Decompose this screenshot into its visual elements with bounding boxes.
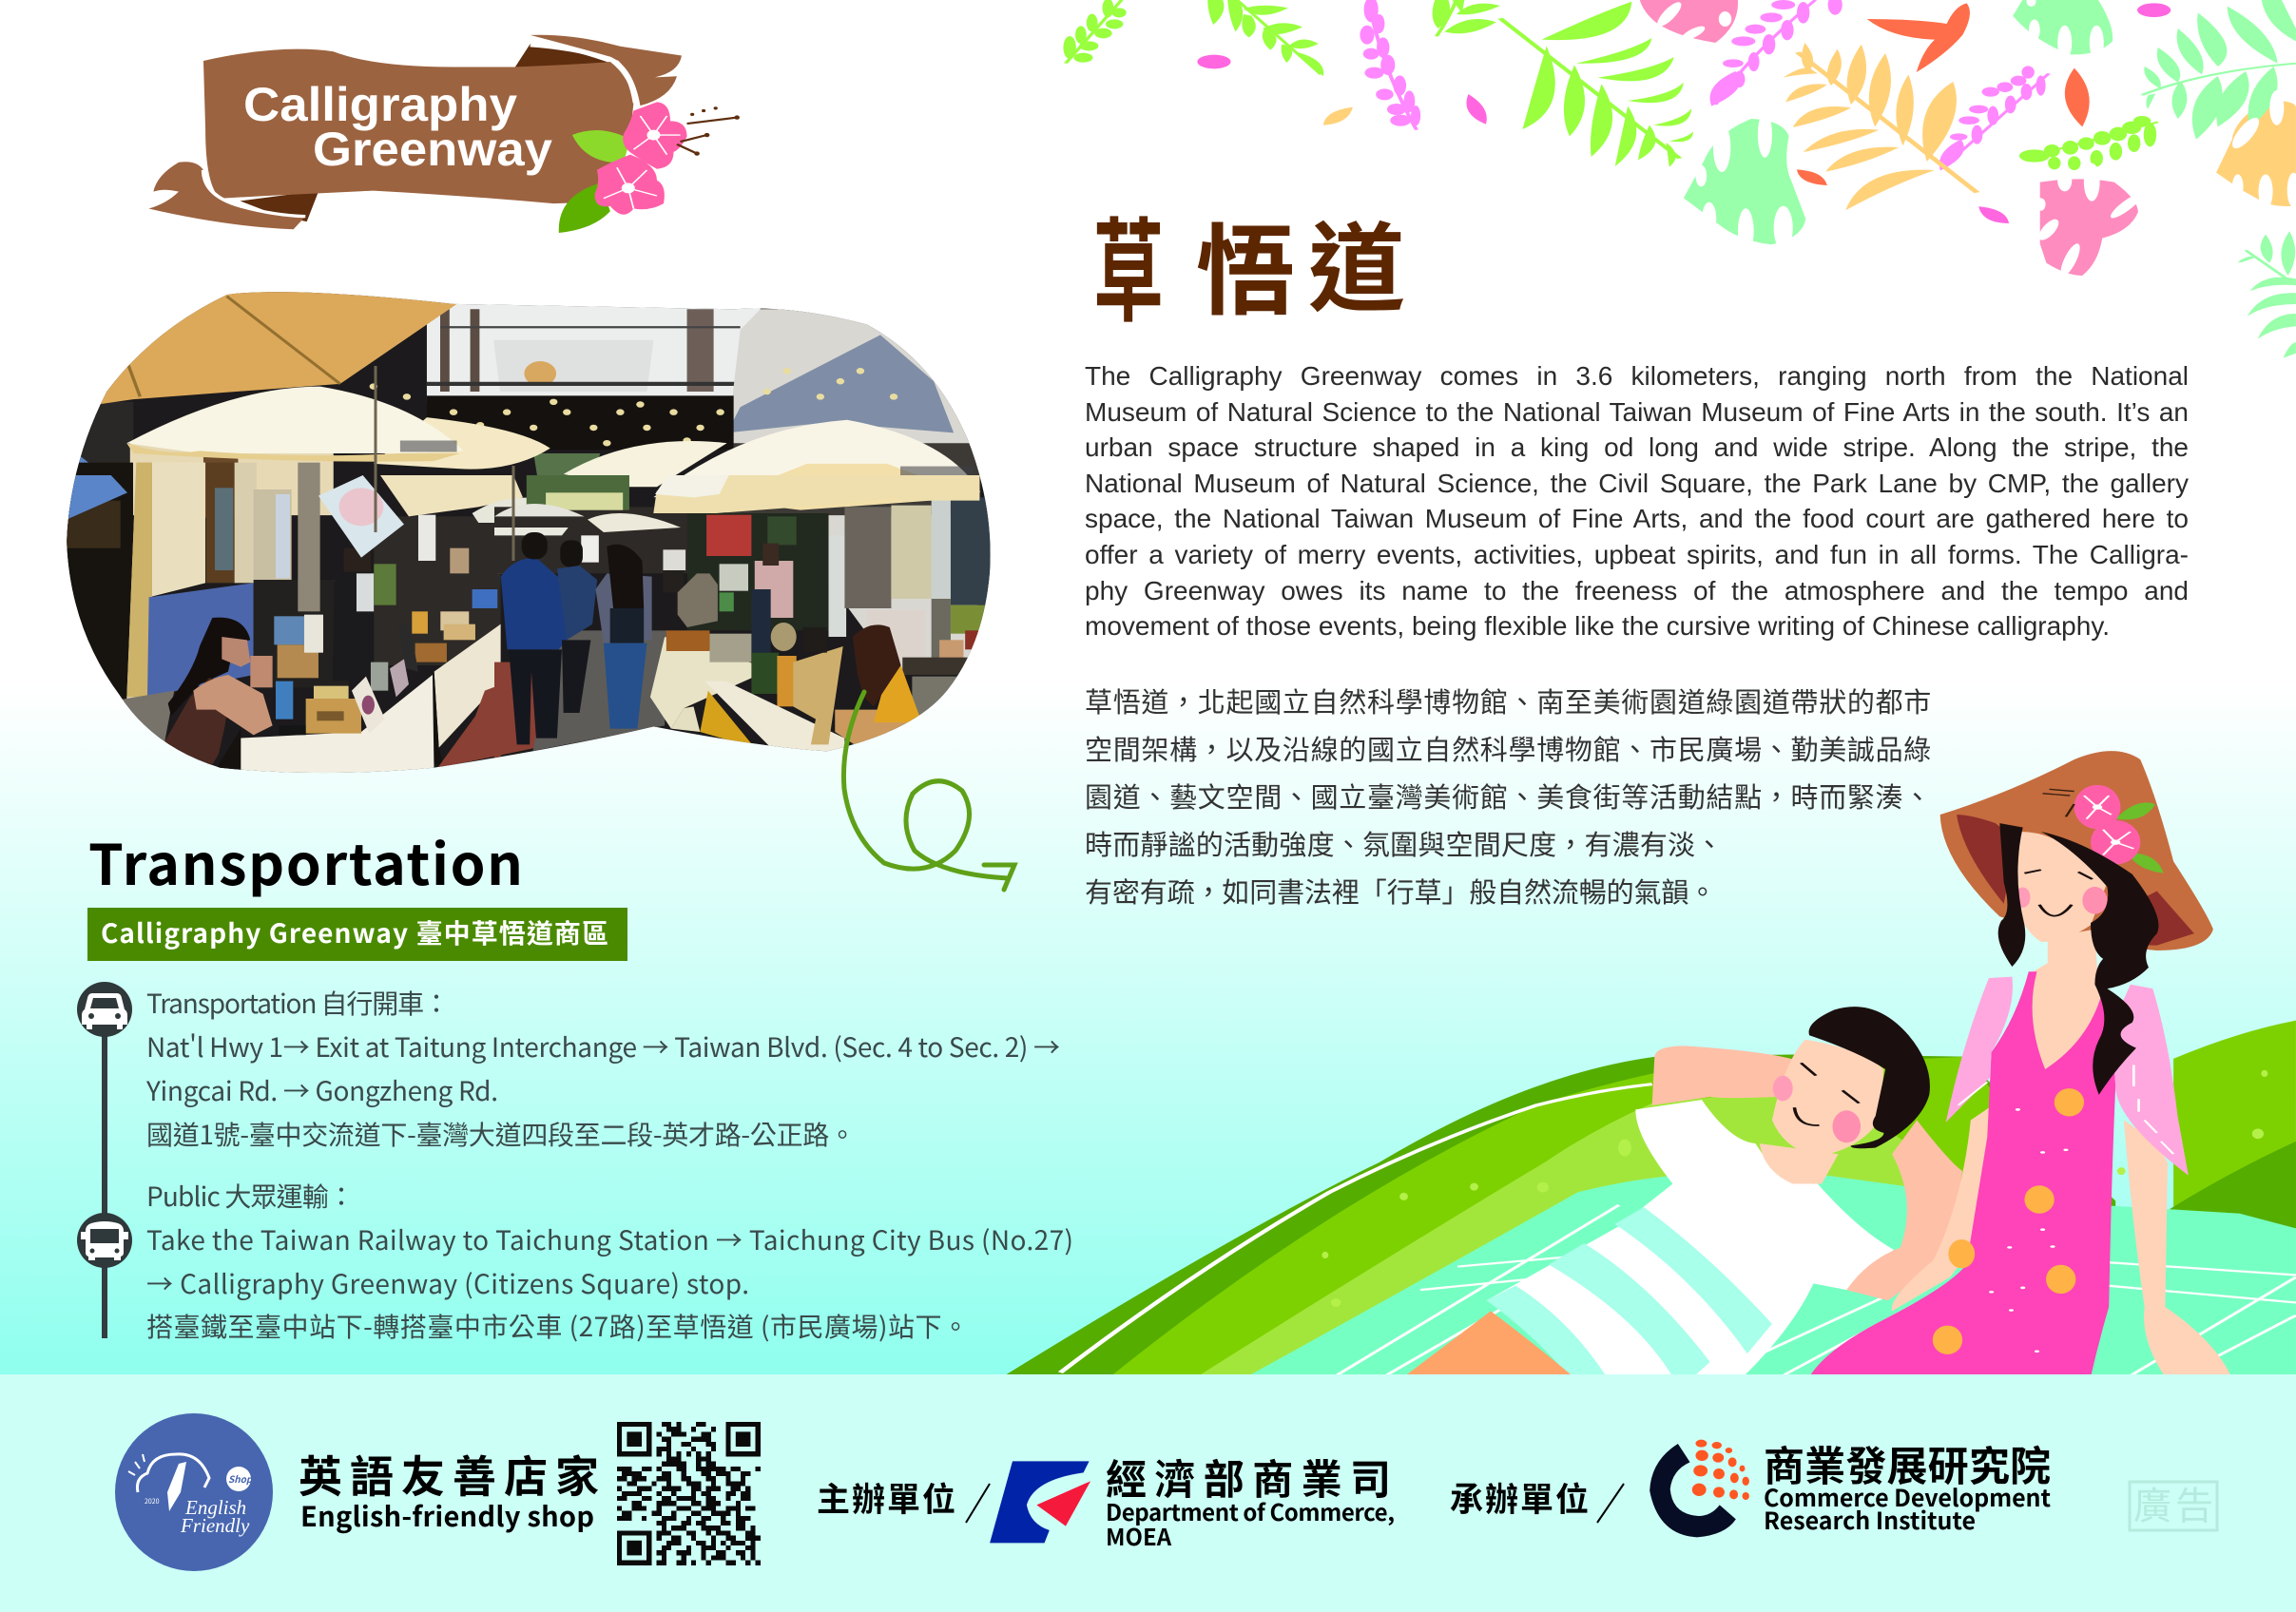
photo: central crowd and right stalls <box>494 475 993 760</box>
English paragraph: urban space structure shaped in a king od long and wide stripe. Along the stripe, the <box>1085 432 2189 462</box>
subheading bar: shop district <box>87 908 627 961</box>
English paragraph: Museum of Natural Science to the National Taiwan Museum of Fine Arts in the south. It’s an <box>1085 397 2189 427</box>
woman <box>1809 751 2231 1377</box>
route text: Public 大眾運輸： <box>146 1177 355 1215</box>
English-friendly shop label <box>299 1443 599 1535</box>
organizer name: CDRI: 商業發展研究院 <box>1764 1434 2051 1493</box>
organizer name: CDRI <box>1764 1434 2051 1537</box>
route text: Transportation 自行開車： <box>146 984 450 1022</box>
arrow: green swirl <box>843 692 1014 890</box>
icon: bus <box>77 1213 132 1268</box>
photo: green trees <box>534 453 601 475</box>
route timeline <box>77 982 1073 1345</box>
English paragraph: phy Greenway owes its name to the freeness of the atmosphere and the tempo and <box>1085 576 2189 605</box>
English paragraph: The Calligraphy Greenway comes in 3.6 kilometers, ranging north from the National <box>1085 361 2189 391</box>
QR code <box>617 1425 761 1563</box>
icon: car <box>77 982 132 1037</box>
logo: Department of Commerce <box>990 1461 1090 1543</box>
heading: 草悟道 <box>1093 182 1405 345</box>
ribbon shape <box>148 35 682 229</box>
photo: parasols <box>374 417 550 470</box>
English-friendly shop label: 英語友善店家 <box>299 1443 599 1506</box>
photo: lower street in page coordinates <box>48 366 993 777</box>
logo: English Friendly: 2020 <box>145 1497 160 1506</box>
English paragraph: National Museum of Natural Science, the Civil Square, the Park Lane by CMP, the gallery <box>1085 469 2189 498</box>
picnic blanket <box>1246 1176 2296 1377</box>
English paragraph: offer a variety of merry events, activities, upbeat spirits, and fun in all forms. The Calligra- <box>1085 540 2189 569</box>
man <box>1404 1007 1962 1377</box>
photo: parasol poles <box>376 366 513 561</box>
photo: string-light bridge <box>427 395 734 450</box>
subheading bar: shop district: Calligraphy Greenway 臺中草悟道商區 <box>101 913 608 951</box>
English paragraph: movement of those events, being flexible like the cursive writing of Chinese calligraphy. <box>1085 611 2110 641</box>
route text: Take the Taiwan Railway to Taichung Station → Taichung City Bus (No.27) <box>146 1220 1073 1258</box>
banner text: Calligraphy <box>243 78 517 131</box>
Chinese paragraph: 園道、藝文空間、國立臺灣美術館、美食街等活動結點，時而緊湊、 <box>1085 776 1932 816</box>
photo: left side stalls <box>48 463 551 777</box>
route text: 搭臺鐵至臺中站下-轉搭臺中市公車 (27路)至草悟道 (市民廣場)站下。 <box>146 1307 969 1345</box>
organizer name: MOEA: Department of Commerce, <box>1106 1494 1395 1527</box>
illustration: couple on a picnic hill <box>1002 751 2296 1377</box>
logo: English Friendly: Shop <box>228 1471 254 1486</box>
organizer label: 主辦單位 <box>817 1473 957 1522</box>
heading: Transportation: Transportation <box>88 820 523 901</box>
hills <box>1002 1021 2296 1377</box>
route text: 國道1號-臺中交流道下-臺灣大道四段至二段-英才路-公正路。 <box>146 1115 856 1153</box>
route text: Yingcai Rd. → Gongzheng Rd. <box>145 1071 498 1109</box>
organizer name: MOEA <box>1106 1448 1395 1552</box>
photo: sky and banner <box>427 304 761 402</box>
Chinese paragraph <box>1085 681 1932 911</box>
footer band <box>0 1374 2296 1612</box>
photo: upper left wall <box>67 402 133 515</box>
heading: 草悟道: 草 <box>1093 182 1164 345</box>
braid <box>2041 832 2158 1095</box>
Chinese paragraph: 時而靜謐的活動強度、氛圍與空間尺度，有濃有淡、 <box>1085 823 1724 863</box>
photo: market street under parasols <box>48 283 1000 783</box>
Chinese paragraph: 草悟道，北起國立自然科學博物館、南至美術園道綠園道帶狀的都市 <box>1085 681 1932 720</box>
Chinese paragraph: 空間架構，以及沿線的國立自然科學博物館、市民廣場、勤美誠品綠 <box>1085 728 1932 768</box>
banner text: Greenway <box>313 123 552 176</box>
logo: English Friendly <box>115 1413 273 1571</box>
photo: right buildings <box>727 309 980 670</box>
heading: 草悟道: 道 <box>1308 192 1405 332</box>
co-organizer label: 承辦單位 <box>1450 1473 1591 1522</box>
organizer name: MOEA: 經濟部商業司 <box>1106 1448 1391 1506</box>
organizer name: CDRI: Research Institute <box>1764 1503 1976 1537</box>
route text: → Calligraphy Greenway (Citizens Square) stop. <box>146 1264 749 1302</box>
English paragraph <box>1085 361 2189 641</box>
heading: 草悟道: 悟 <box>1196 191 1295 335</box>
icon: flowers <box>559 102 740 233</box>
banner text <box>243 78 552 176</box>
Chinese paragraph: 有密有疏，如同書法裡「行草」般自然流暢的氣韻。 <box>1085 871 1717 911</box>
logo: Commerce Development Research Institute <box>1650 1440 1749 1537</box>
English-friendly shop label: English-friendly shop <box>300 1495 594 1535</box>
English paragraph: space, the National Taiwan Museum of Fine Arts, and the food court are gathered here to <box>1085 504 2189 533</box>
logo: English Friendly: English <box>184 1496 246 1519</box>
organizer name: MOEA: MOEA <box>1106 1519 1172 1552</box>
route text: Nat'l Hwy 1→ Exit at Taitung Interchange → Taiwan Blvd. (Sec. 4 to Sec. 2) → <box>146 1027 1060 1065</box>
organizer name: CDRI: Commerce Development <box>1764 1480 2051 1514</box>
route text <box>145 984 1073 1345</box>
photo: tan umbrella <box>101 292 456 405</box>
advertisement stamp: 廣告 <box>2133 1475 2213 1530</box>
title banner: Calligraphy Greenway <box>148 35 740 233</box>
dress dots <box>1933 1088 2084 1354</box>
tropical leaves decoration <box>1063 0 2296 358</box>
hat flowers <box>2043 785 2164 873</box>
logo: English Friendly: Friendly <box>180 1514 250 1537</box>
